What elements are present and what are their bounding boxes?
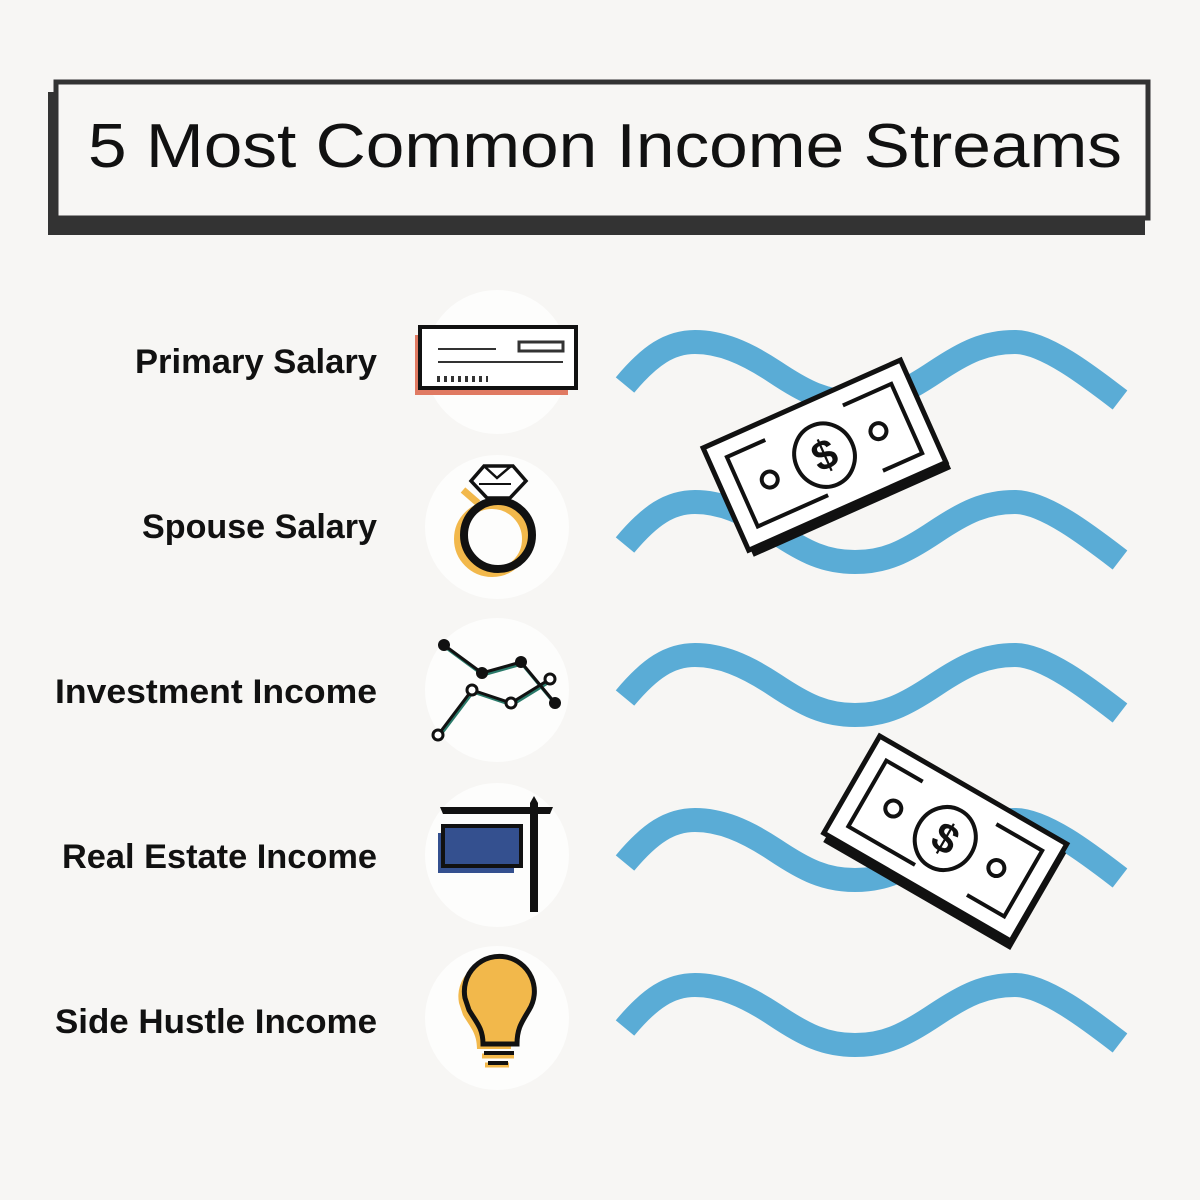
icon: real estate sign [438, 796, 553, 912]
label: primary salary: Primary Salary [135, 343, 377, 381]
label: side hustle income: Side Hustle Income [55, 1003, 377, 1041]
icon: lightbulb [458, 956, 534, 1065]
waves [625, 342, 1120, 1045]
icon: chart [433, 639, 561, 740]
money bill 1 [703, 359, 951, 558]
money bill 2: $ [924, 812, 967, 864]
label: real estate income: Real Estate Income [62, 838, 377, 876]
icon circles [425, 290, 569, 1090]
icon: check [415, 327, 576, 395]
labels [55, 343, 377, 1041]
label: spouse salary: Spouse Salary [142, 508, 377, 546]
money bill 1: $ [804, 428, 845, 481]
icon: ring [458, 466, 532, 573]
title box [48, 82, 1148, 235]
money bill 2 [820, 736, 1070, 950]
label: investment income: Investment Income [55, 673, 377, 711]
title: 5 Most Common Income Streams [88, 112, 1122, 181]
